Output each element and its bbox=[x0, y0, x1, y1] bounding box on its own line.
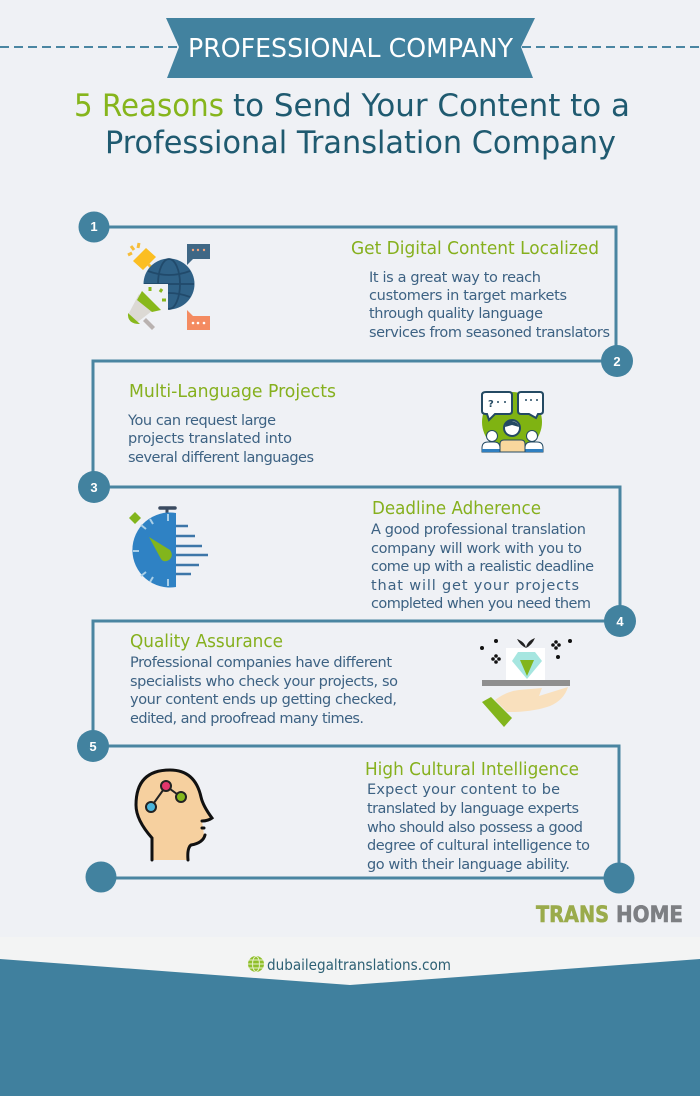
step 2 text: projects translated into bbox=[128, 431, 292, 447]
step 1 text: Get Digital Content Localized bbox=[351, 238, 599, 259]
step 3 text: company will work with you to bbox=[371, 541, 582, 557]
step marker 5 bbox=[77, 730, 109, 762]
step 5 text: degree of cultural intelligence to bbox=[367, 838, 590, 854]
step 5 text: who should also possess a good bbox=[367, 820, 583, 836]
step 1 text: customers in target markets bbox=[369, 288, 567, 304]
step marker 2: 2 bbox=[613, 354, 621, 369]
step 1 text bbox=[351, 238, 610, 341]
icon: people talking: ? bbox=[488, 399, 494, 410]
icon: globe and megaphone bbox=[128, 243, 210, 330]
right person bbox=[525, 430, 543, 452]
footer wave bbox=[0, 959, 700, 1096]
icon: stopwatch bbox=[129, 508, 208, 588]
banner: professional company: PROFESSIONAL COMPANY bbox=[188, 34, 513, 64]
step 5 text: High Cultural Intelligence bbox=[365, 759, 579, 780]
step 3 text: come up with a realistic deadline bbox=[371, 559, 594, 575]
step 1 text: services from seasoned translators bbox=[369, 325, 610, 341]
timeline end left bbox=[86, 862, 116, 892]
title bbox=[74, 88, 630, 161]
step 3 text: that will get your projects bbox=[371, 578, 579, 594]
step marker 1 bbox=[78, 212, 110, 242]
step 1 text: through quality language bbox=[369, 306, 543, 322]
step marker 2 bbox=[601, 345, 633, 377]
logo: trans home: TRANS bbox=[536, 903, 609, 928]
step 4 text: Quality Assurance bbox=[130, 631, 283, 652]
icon: diamond on tray bbox=[480, 638, 572, 727]
logo: trans home: HOME bbox=[616, 903, 683, 928]
step 3 text: completed when you need them bbox=[371, 596, 591, 612]
step marker 3: 3 bbox=[90, 480, 98, 495]
step 5 text: go with their language ability. bbox=[367, 857, 570, 873]
title: Professional Translation Company bbox=[105, 125, 616, 161]
step 3 text: Deadline Adherence bbox=[372, 498, 541, 519]
timeline connector bbox=[93, 227, 620, 878]
step marker 3 bbox=[78, 471, 110, 503]
icon: people talking bbox=[482, 392, 543, 452]
title: 5 Reasons bbox=[74, 88, 224, 124]
step 2 text bbox=[127, 381, 336, 466]
logo: trans home bbox=[536, 903, 683, 928]
step 4 text: your content ends up getting checked, bbox=[130, 692, 397, 708]
center person bbox=[500, 420, 525, 452]
step 5 text bbox=[365, 759, 590, 873]
banner: professional company bbox=[166, 18, 535, 78]
step 2 text: Multi-Language Projects bbox=[129, 381, 336, 402]
step 4 text: specialists who check your projects, so bbox=[130, 674, 398, 690]
left person bbox=[482, 430, 500, 452]
website link: dubailegaltranslations.com bbox=[267, 956, 451, 974]
title: to Send Your Content to a bbox=[233, 88, 630, 124]
step 2 text: You can request large bbox=[127, 413, 276, 429]
step marker 1: 1 bbox=[90, 219, 98, 234]
header dashed line bbox=[0, 46, 700, 48]
step marker 4 bbox=[604, 605, 636, 637]
step 3 text: A good professional translation bbox=[371, 522, 586, 538]
step 5 text: translated by language experts bbox=[367, 801, 579, 817]
step marker 4: 4 bbox=[616, 614, 624, 629]
timeline end right bbox=[604, 862, 634, 894]
step 4 text: edited, and proofread many times. bbox=[130, 711, 364, 727]
icon: head with network bbox=[136, 770, 212, 860]
footer band bbox=[0, 937, 700, 987]
step 3 text bbox=[371, 498, 594, 612]
step 1 text: It is a great way to reach bbox=[369, 270, 541, 286]
step 2 text: several different languages bbox=[128, 450, 314, 466]
step 4 text bbox=[130, 631, 398, 727]
step marker 5: 5 bbox=[89, 739, 97, 754]
step 5 text: Expect your content to be bbox=[367, 782, 560, 798]
step 4 text: Professional companies have different bbox=[130, 655, 392, 671]
